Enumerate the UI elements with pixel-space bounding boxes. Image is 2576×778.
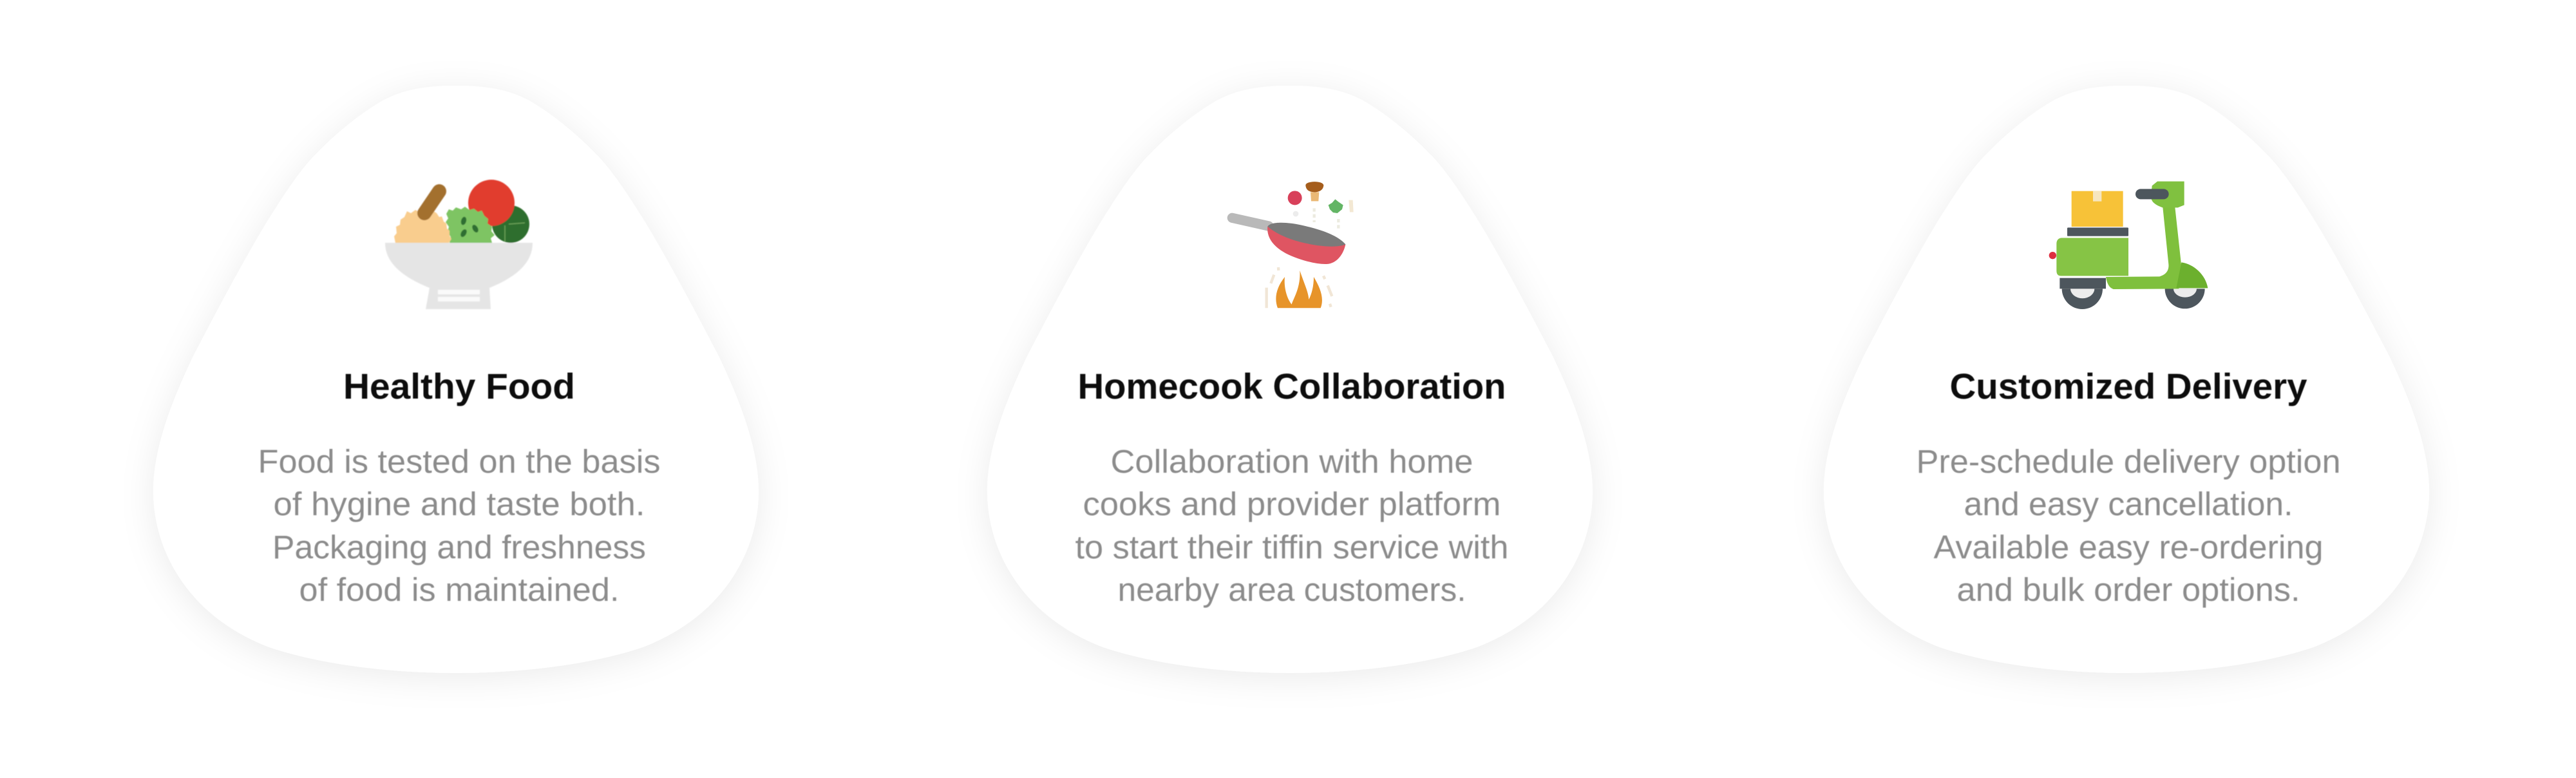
card shape: Customized Delivery bbox=[1824, 86, 2429, 673]
panel: Customized Delivery bbox=[1824, 86, 2429, 673]
text block: Healthy Food description bbox=[258, 443, 661, 608]
text block: Customized Delivery description: and easy cancellation. bbox=[1964, 486, 2293, 522]
text block: Customized Delivery description bbox=[1917, 443, 2340, 608]
text block: Customized Delivery description: and bulk order options. bbox=[1956, 571, 2300, 608]
text block: Healthy Food description: Food is tested on the basis bbox=[258, 443, 661, 480]
panel: Healthy Food bbox=[151, 179, 761, 681]
panel: Homecook Collaboration bbox=[987, 86, 1593, 673]
icon: delivery scooter bbox=[2049, 182, 2208, 309]
text block: Healthy Food description: Packaging and freshness bbox=[272, 529, 646, 565]
text block: Customized Delivery description: Pre-schedule delivery option bbox=[1917, 443, 2340, 480]
heading: Customized Delivery: Customized Delivery bbox=[1950, 366, 2307, 406]
heading: Homecook Collaboration: Homecook Collaboration bbox=[1078, 366, 1506, 406]
icon: food bowl bbox=[385, 180, 533, 309]
card shape: Healthy Food bbox=[153, 86, 759, 673]
icon: frying pan over flame bbox=[1232, 182, 1354, 308]
card shape: Homecook Collaboration bbox=[987, 86, 1593, 673]
text block: Healthy Food description: of food is maintained. bbox=[299, 571, 620, 608]
text block: Homecook Collaboration description: to start their tiffin service with bbox=[1075, 529, 1508, 565]
text block: Customized Delivery description: Available easy re-ordering bbox=[1933, 529, 2324, 565]
heading: Healthy Food: Healthy Food bbox=[343, 366, 575, 406]
text block: Homecook Collaboration description: nearby area customers. bbox=[1118, 571, 1466, 608]
text block: Healthy Food description: of hygine and taste both. bbox=[273, 486, 645, 522]
text block: Homecook Collaboration description bbox=[1075, 443, 1508, 608]
text block: Homecook Collaboration description: Collaboration with home bbox=[1110, 443, 1473, 480]
text block: Homecook Collaboration description: cooks and provider platform bbox=[1083, 486, 1501, 522]
